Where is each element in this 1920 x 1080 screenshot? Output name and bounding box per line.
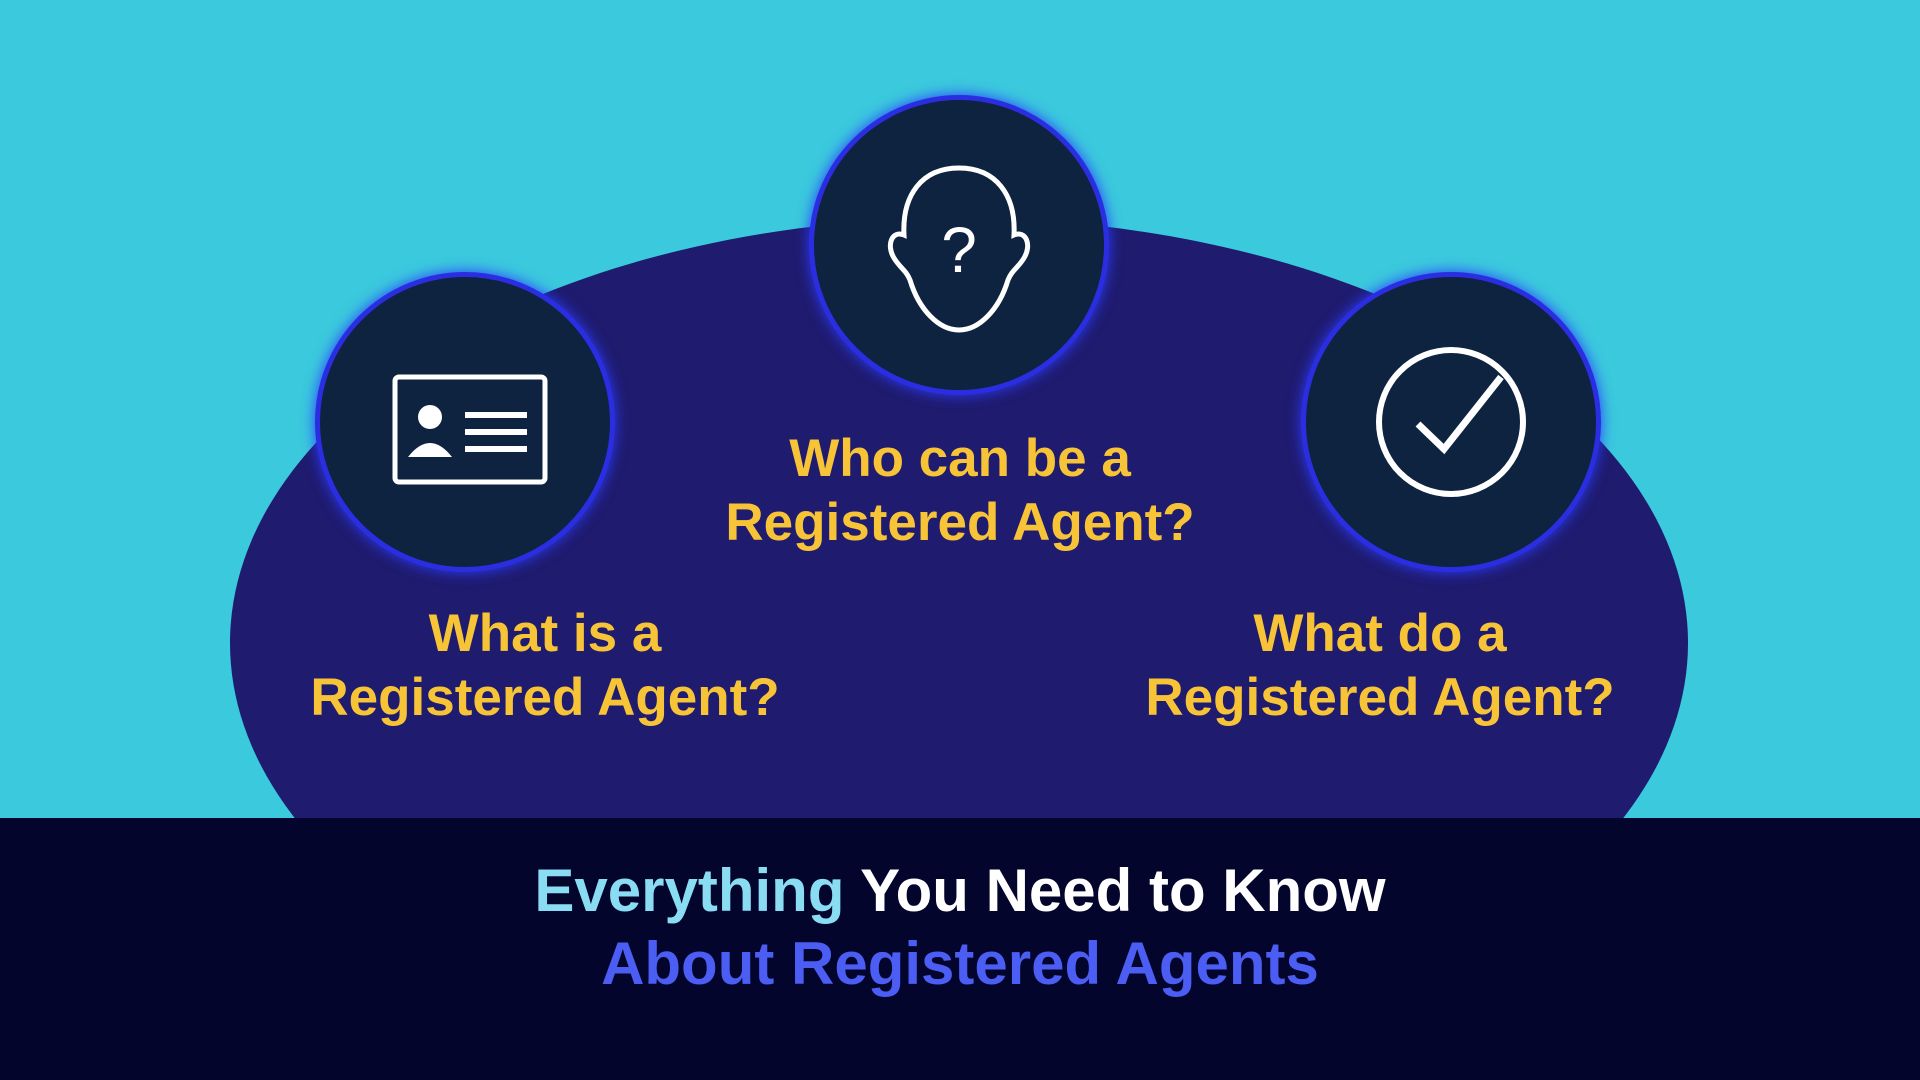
title: Everything You Need to Know: [534, 857, 1386, 924]
question: what is: [310, 604, 780, 727]
question: who: Who can be a: [789, 429, 1131, 488]
bottom title band: [0, 818, 1920, 1080]
title: About Registered Agents: [601, 930, 1319, 997]
icon circle: check: [1301, 272, 1601, 572]
question: what do: What do a: [1253, 604, 1507, 663]
question: what is: What is a: [429, 604, 661, 663]
icon circle: who: ?: [941, 214, 977, 286]
question: what do: [1145, 604, 1615, 727]
icon circle: who: [809, 95, 1109, 395]
ellipse background: [230, 218, 1688, 1068]
question: who: [725, 429, 1195, 552]
question: what is: Registered Agent?: [310, 668, 780, 727]
question: what do: Registered Agent?: [1145, 668, 1615, 727]
icon circle: id card: [315, 272, 615, 572]
title: [534, 857, 1386, 997]
question: who: Registered Agent?: [725, 493, 1195, 552]
